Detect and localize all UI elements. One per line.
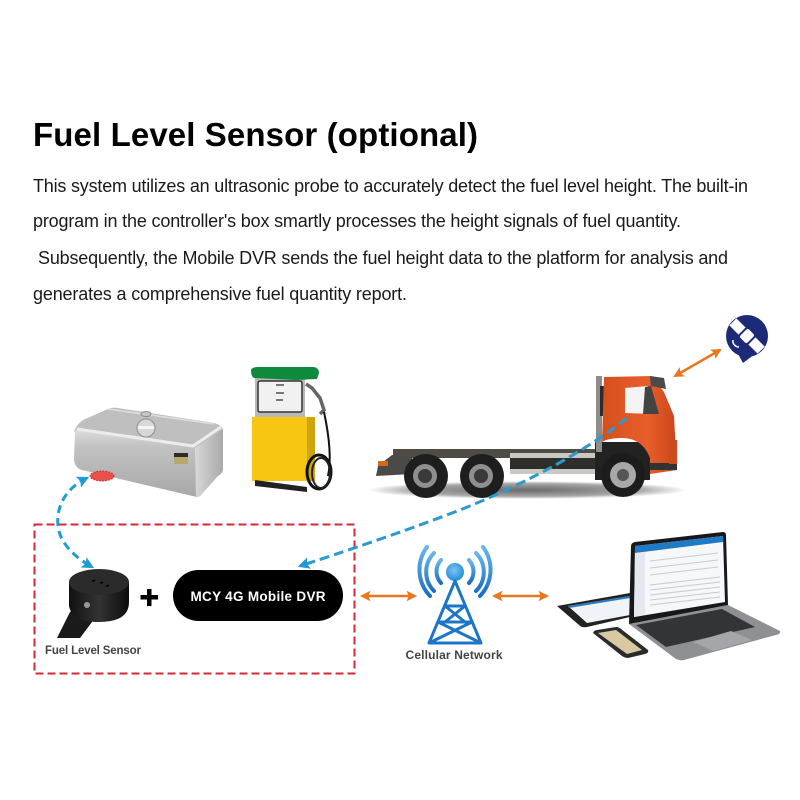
- arrow: tower to devices: [494, 595, 547, 597]
- wheels: [404, 453, 645, 498]
- arrow: tank to sensor: [58, 478, 92, 567]
- arrow: truck to DVR: [300, 418, 627, 566]
- DVR pill: MCY 4G Mobile DVR: [190, 589, 326, 604]
- icon: plus: [140, 589, 158, 606]
- label: cellular network: Cellular Network: [406, 648, 503, 662]
- title: Fuel Level Sensor (optional): [33, 116, 478, 153]
- arrow: satellite to truck: [675, 350, 720, 376]
- truck shadow: [367, 481, 687, 499]
- description paragraph: Subsequently, the Mobile DVR sends the fuel height data to the platform for analysis and: [38, 248, 728, 268]
- red dashed box: [34, 524, 354, 674]
- icon: cellular tower: [419, 547, 491, 643]
- icon: fuel level sensor: [57, 569, 129, 638]
- chassis: [393, 449, 605, 458]
- laptop base: [629, 605, 780, 660]
- icon: fuel pump: [251, 367, 331, 492]
- cab: [602, 376, 677, 474]
- icon: truck: [367, 376, 687, 499]
- tablet: [557, 593, 630, 627]
- description paragraph: program in the controller's box smartly processes the height signals of fuel quantity.: [33, 211, 681, 231]
- sensor location marker: [90, 471, 114, 481]
- icon: devices: [557, 532, 780, 660]
- description paragraph: This system utilizes an ultrasonic probe to accurately detect the fuel level height. The built-in: [33, 176, 748, 196]
- description paragraph: [33, 176, 748, 304]
- DVR pill: [173, 570, 343, 621]
- phone: [593, 627, 648, 658]
- icon: fuel tank: [74, 408, 223, 497]
- label: fuel level sensor: Fuel Level Sensor: [45, 645, 142, 657]
- icon: satellite: [726, 315, 768, 363]
- description paragraph: generates a comprehensive fuel quantity report.: [33, 284, 407, 304]
- arrow: DVR to tower: [362, 595, 415, 597]
- laptop screen: [629, 532, 728, 624]
